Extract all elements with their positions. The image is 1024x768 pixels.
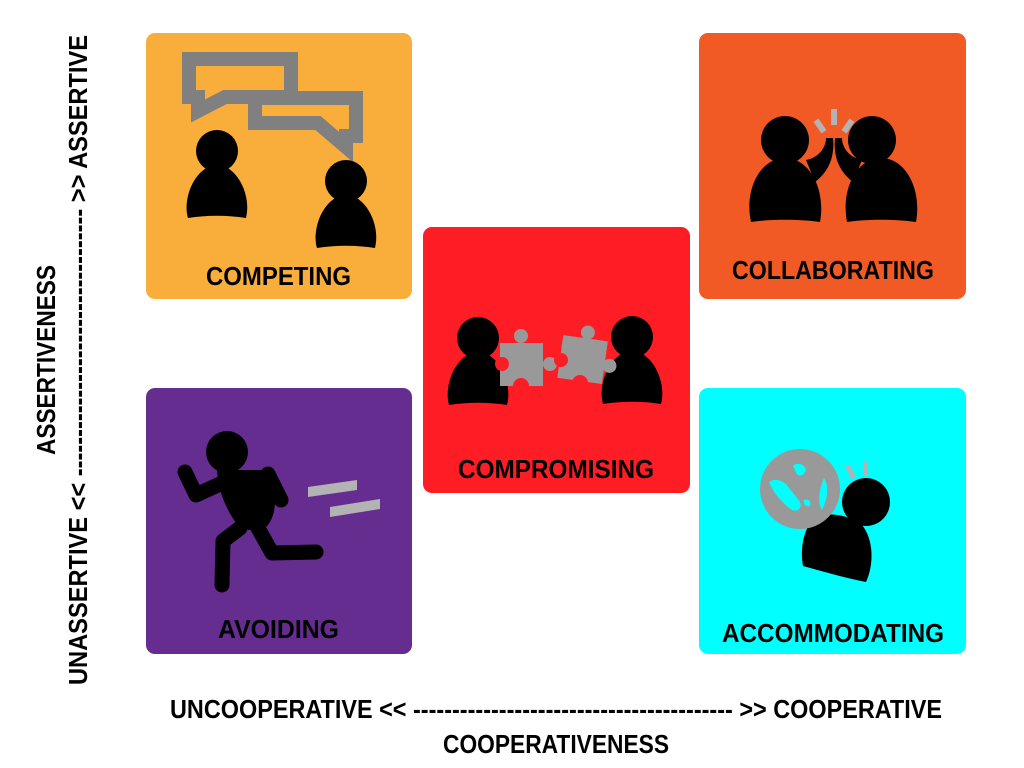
label: competing: COMPETING (206, 261, 351, 291)
panel: avoiding (146, 388, 412, 654)
axis label: assertiveness: ASSERTIVENESS (31, 265, 61, 455)
icon: two people (187, 130, 376, 248)
panel: competing (146, 33, 412, 299)
label: compromising: COMPROMISING (458, 454, 654, 484)
panel: collaborating (699, 33, 966, 299)
icon: running person (185, 431, 316, 585)
panel: compromising (423, 227, 690, 493)
axis label: cooperativeness: COOPERATIVENESS (443, 729, 669, 759)
axis scale: uncooperative to cooperative: UNCOOPERATIVE << ----------------------------------------- >> COOPERATIVE (170, 694, 942, 724)
icon: people with puzzle pieces (448, 316, 662, 405)
label: accommodating: ACCOMMODATING (722, 618, 944, 648)
icon: speech bubbles (189, 59, 356, 147)
label: collaborating: COLLABORATING (732, 255, 934, 285)
icon: globe and person (760, 449, 890, 582)
icon: speed lines (308, 480, 380, 517)
label: avoiding: AVOIDING (218, 614, 339, 644)
icon: high five (749, 109, 917, 222)
panel: accommodating (699, 388, 966, 654)
